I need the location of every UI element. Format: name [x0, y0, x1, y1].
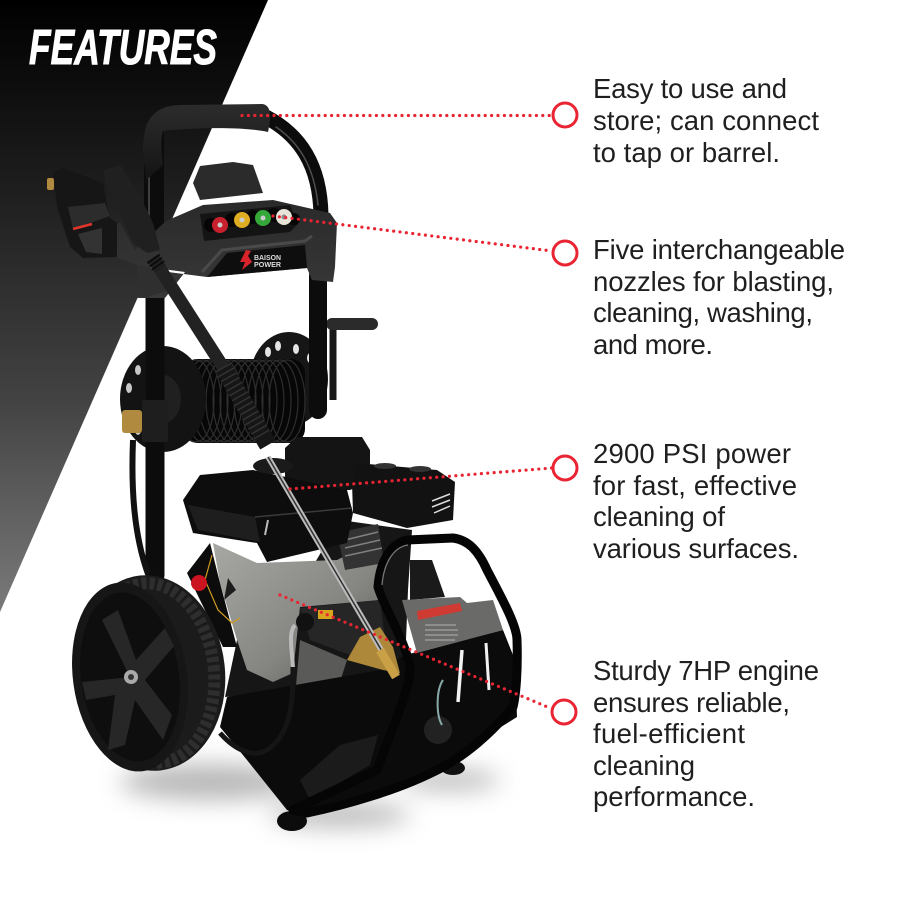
spray gun [47, 165, 160, 258]
hose reel [120, 324, 372, 452]
engine block [187, 524, 384, 686]
stainless lance [268, 457, 396, 677]
callout line 3 [290, 456, 577, 489]
feature text: nozzles: and more. [593, 329, 713, 360]
logo: BAISON [254, 255, 281, 262]
background gradient wedge [0, 0, 268, 612]
logo [240, 250, 281, 270]
feature text: nozzles: Five interchangeable [593, 234, 845, 265]
feature text: nozzles [593, 234, 845, 360]
feature text: nozzles: cleaning, washing, [593, 297, 813, 328]
feature text: pressure [593, 438, 799, 564]
pressure washer illustration [47, 104, 517, 831]
feature text: engine: ensures reliable, [593, 687, 790, 718]
nozzle holder plate [193, 162, 263, 200]
feature text: engine: cleaning [593, 750, 695, 781]
callout line 4 [280, 595, 576, 724]
feature text: pressure: 2900 PSI power [593, 438, 791, 469]
recoil cover [352, 463, 455, 528]
nozzles [204, 208, 300, 233]
title: FEATURES [29, 21, 217, 75]
logo: POWER [254, 262, 281, 269]
red fuel knob [191, 575, 207, 591]
feature text: engine: fuel-efficient [593, 718, 745, 749]
feature text: easy to use [593, 73, 819, 168]
rear wheel glimpse [410, 560, 445, 600]
feature text: engine: Sturdy 7HP engine [593, 655, 819, 686]
front frame guard [293, 538, 517, 813]
foam grip handle [143, 104, 270, 180]
feature text: engine: performance. [593, 781, 755, 812]
left hose and reel bracket [122, 400, 168, 574]
black pressure hose [220, 667, 293, 753]
callout line 1 [242, 103, 577, 127]
main tank base [220, 630, 517, 831]
feature text: easy to use: Easy to use and [593, 73, 787, 104]
feature text: easy to use: store; can connect [593, 105, 819, 136]
feature text: engine [593, 655, 819, 812]
feature text: pressure: various surfaces. [593, 533, 799, 564]
wheel [60, 568, 235, 779]
rear frame tubes [149, 117, 321, 575]
pump [291, 600, 400, 673]
fuel tank [183, 458, 353, 562]
feature text: nozzles: nozzles for blasting, [593, 266, 834, 297]
dark rear machinery [225, 520, 412, 697]
feature text: pressure: cleaning of [593, 501, 725, 532]
spec plate [402, 597, 503, 744]
callout line 2 [273, 216, 577, 265]
floor shadow [120, 764, 500, 827]
control panel [110, 200, 337, 298]
feature text: pressure: for fast, effective [593, 470, 797, 501]
feature text: easy to use: to tap or barrel. [593, 137, 780, 168]
spray wand [153, 258, 268, 445]
engine rear tank [285, 437, 370, 490]
